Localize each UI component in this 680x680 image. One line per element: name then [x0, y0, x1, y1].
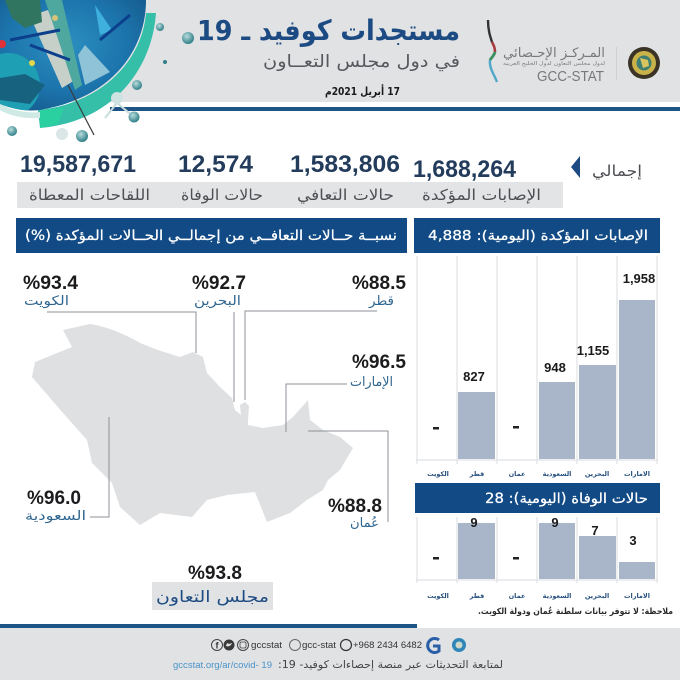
label: Qatar: قطر	[368, 294, 394, 309]
total: deaths: 12,574	[178, 151, 254, 178]
bar chart: daily deaths: عمان	[509, 593, 525, 600]
bar chart: daily deaths: 7	[591, 523, 599, 538]
icon: facebook: f	[216, 640, 220, 650]
heading: daily cases	[414, 218, 660, 253]
GCC-STAT logo: لدول مجلس التعاون لدول الخليج العربية	[503, 61, 606, 67]
title: مستجدات كوفيد ـ 19	[197, 14, 460, 47]
bar chart: daily deaths	[416, 515, 658, 600]
bar chart: daily deaths: السعودية	[543, 593, 571, 600]
bar chart: daily cases: 827	[463, 369, 485, 384]
label: Saudi Arabia: %96.0	[27, 488, 81, 509]
heading: daily deaths	[415, 483, 660, 513]
bar chart: daily cases: قطر	[469, 471, 484, 478]
footer contacts	[212, 638, 466, 652]
bar chart: daily deaths: الامارات	[624, 593, 650, 600]
date: 17 أبريل 2021م	[325, 84, 400, 98]
total: vaccines: اللقاحات المعطاة	[29, 186, 150, 204]
total label with arrow: إجمالي	[592, 162, 642, 181]
total: recoveries: 1,583,806	[290, 151, 400, 178]
total: recoveries: حالات التعافي	[297, 186, 394, 205]
icon: linkedin	[290, 640, 300, 650]
linkedin handle: gcc-stat	[302, 640, 336, 651]
icon: twitter	[224, 640, 234, 650]
total: recoveries	[290, 151, 400, 205]
label: Kuwait: الكويت	[24, 294, 69, 309]
label: Saudi Arabia	[25, 488, 86, 524]
icon: whatsapp	[340, 640, 352, 650]
icon: round logo	[452, 638, 466, 652]
decorative virus photo circle	[0, 0, 194, 142]
label: GCC total: مجلس التعاون	[156, 588, 269, 607]
icon: facebook	[212, 640, 222, 650]
footer link line: gccstat.org/ar/covid- 19	[173, 660, 272, 671]
label: Qatar	[352, 273, 406, 309]
GCC-STAT logo: المـركـز الإحـصائي	[503, 46, 605, 61]
GCC-STAT logo	[488, 20, 660, 85]
footer band	[0, 624, 680, 680]
panel: daily deaths	[415, 483, 673, 617]
label: GCC total	[152, 563, 273, 610]
heading: recovery rate	[16, 218, 407, 253]
label: Oman	[328, 496, 382, 531]
label: UAE: %96.5	[352, 352, 406, 373]
bar chart: daily deaths: 9	[551, 515, 559, 530]
grey labels band	[17, 182, 563, 208]
label: Bahrain: %92.7	[192, 273, 246, 294]
subtitle: في دول مجلس التعــاون	[263, 52, 460, 72]
bar chart: daily deaths: قطر	[469, 593, 484, 600]
total: deaths: حالات الوفاة	[181, 186, 263, 204]
label: Bahrain	[192, 273, 246, 309]
bar chart: daily cases	[416, 256, 658, 478]
icon: G logo	[428, 638, 439, 652]
total: confirmed cases: الإصابات المؤكدة	[422, 186, 541, 204]
bar chart: daily cases: السعودية	[543, 471, 571, 478]
map of GCC	[32, 324, 353, 525]
bar chart: daily deaths: البحرين	[585, 593, 609, 600]
total: confirmed cases: 1,688,264	[413, 156, 517, 183]
header band	[0, 0, 680, 111]
leader lines	[47, 311, 388, 522]
total: vaccines	[20, 151, 150, 204]
heading: daily deaths: حالات الوفاة (اليومية): 28	[485, 491, 648, 507]
footer link line: لمتابعة التحديثات عبر منصة إحصاءات كوفيد- 19:	[278, 659, 503, 671]
panel: daily confirmed cases	[414, 218, 660, 478]
heading: daily cases: الإصابات المؤكدة (اليومية): 4,888	[428, 228, 648, 244]
GCC-STAT logo: GCC-STAT	[537, 69, 604, 85]
total: vaccines: 19,587,671	[20, 151, 136, 178]
bar chart: daily deaths: 9	[470, 515, 478, 530]
label: UAE	[350, 352, 406, 390]
label: Oman: %88.8	[328, 496, 382, 517]
label: Oman: عُمان	[350, 515, 379, 531]
phone number: +968 2434 6482	[353, 640, 422, 651]
label: Kuwait	[23, 273, 78, 309]
bar chart: daily cases: الكويت	[427, 471, 449, 478]
label: Bahrain: البحرين	[194, 294, 241, 309]
bar chart: daily deaths: الكويت	[427, 593, 449, 600]
label: Qatar: %88.5	[352, 273, 406, 294]
total: deaths	[178, 151, 263, 204]
bar chart: daily cases: البحرين	[585, 471, 609, 478]
icon: instagram	[238, 640, 248, 650]
label: Kuwait: %93.4	[23, 273, 78, 294]
bar chart: daily cases: الامارات	[624, 471, 650, 478]
label: UAE: الإمارات	[350, 375, 393, 390]
panel: recovery rate	[16, 218, 407, 610]
total: confirmed cases	[413, 156, 541, 204]
social handle: gccstat	[251, 640, 282, 651]
bar chart: daily cases: عمان	[509, 471, 525, 478]
label: Saudi Arabia: السعودية	[25, 509, 86, 524]
footer link line	[173, 659, 503, 671]
bar chart: daily cases: 1,958	[623, 271, 655, 286]
bar chart: daily cases: 1,155	[577, 343, 609, 358]
total label with arrow	[571, 156, 642, 181]
bar chart: daily cases: 948	[544, 360, 566, 375]
heading: recovery rate: نسبــة حــالات التعافــي من إجمالــي الحــالات المؤكدة (%)	[25, 228, 397, 244]
bar chart: daily deaths: 3	[629, 533, 637, 548]
label: GCC total: %93.8	[188, 563, 242, 584]
